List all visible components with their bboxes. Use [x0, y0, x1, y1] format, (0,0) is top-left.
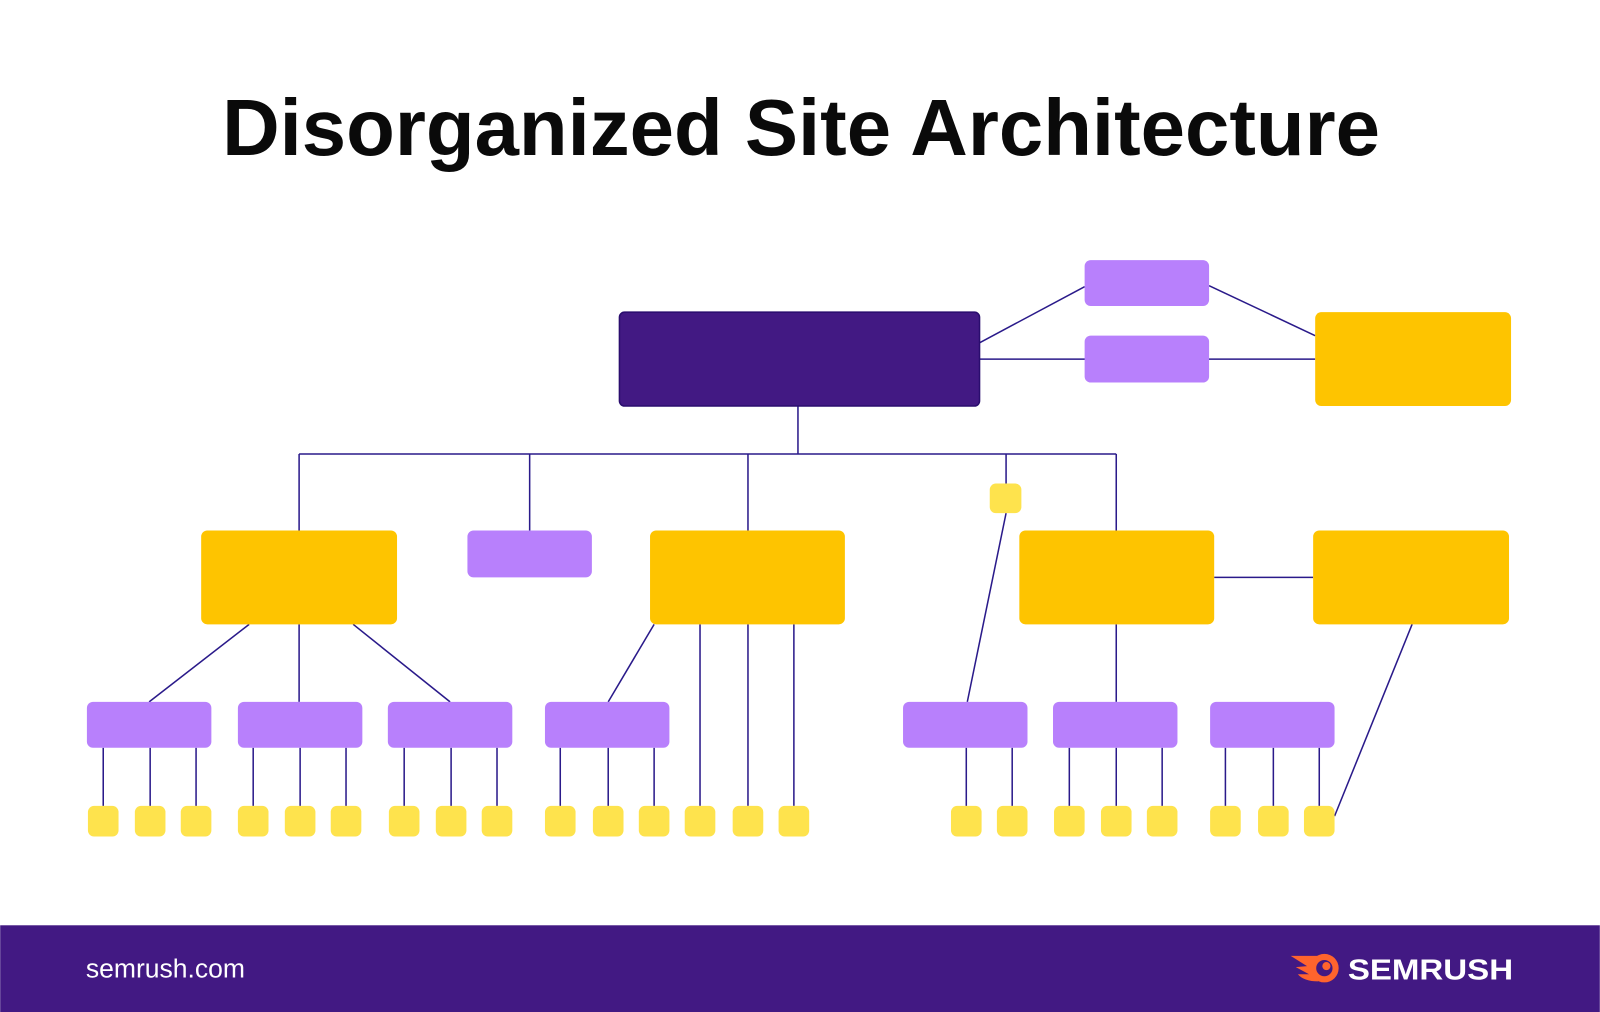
- level 3 nodes: [87, 702, 1335, 748]
- level 2 nodes: [201, 484, 1509, 624]
- logo: SEMRUSH: [1348, 954, 1513, 986]
- logo: [1291, 954, 1513, 986]
- footer bar: [0, 925, 1600, 1012]
- root node: [619, 312, 980, 406]
- title: Disorganized Site Architecture: [222, 83, 1380, 172]
- icon: semrush flame: [1291, 954, 1339, 982]
- top side nodes: [1085, 260, 1511, 406]
- footer url: semrush.com: [86, 955, 245, 983]
- leaf pages: [88, 806, 1335, 837]
- connector lines: [103, 286, 1412, 816]
